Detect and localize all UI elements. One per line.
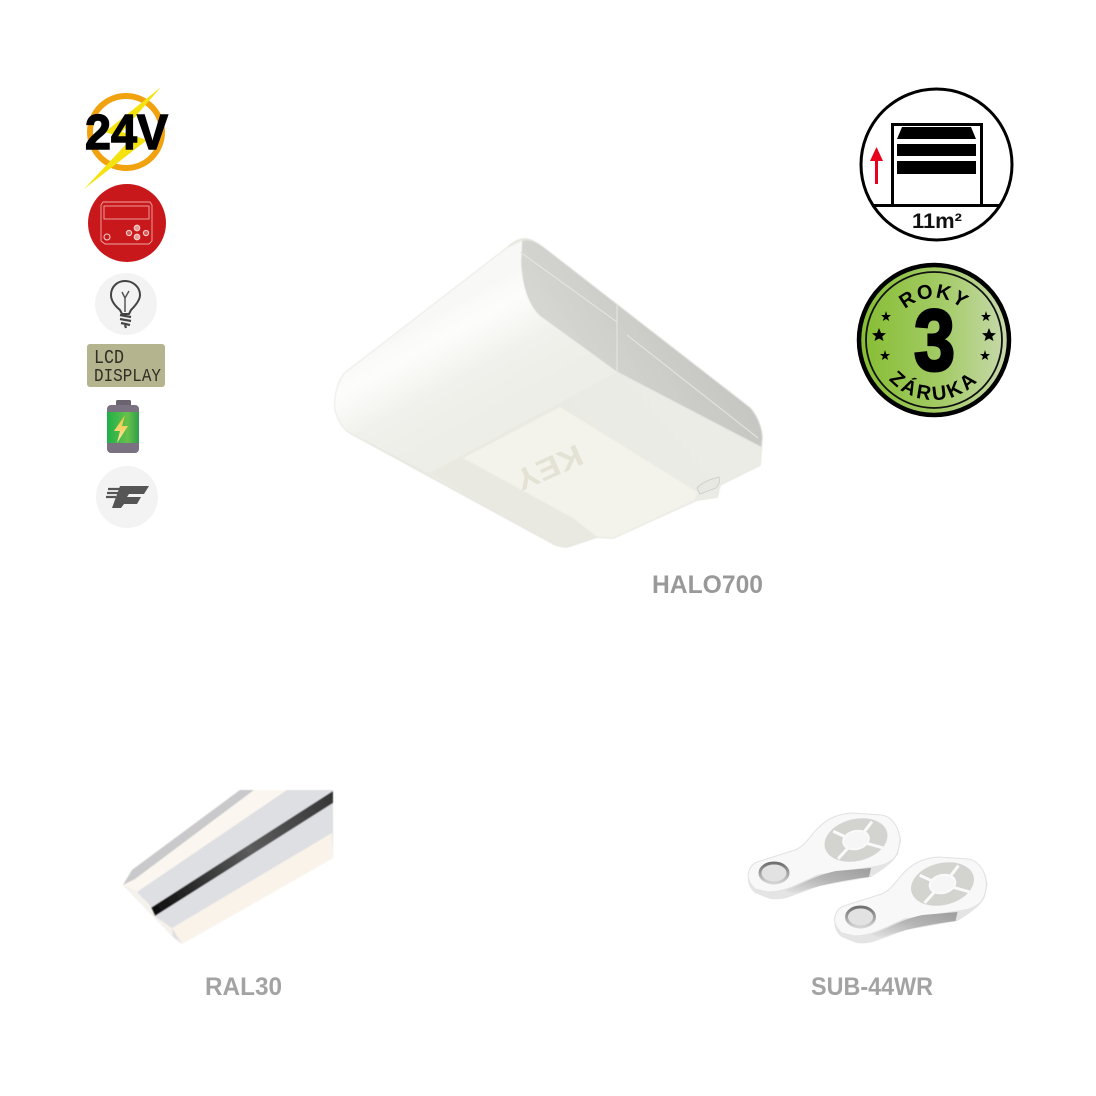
icon: 24V lightning: 24V: [85, 106, 168, 160]
badge: 3 roky záruka: ZÁRUKA: [888, 370, 977, 400]
remote 1: [748, 812, 901, 899]
icon: garage door 11m²: [861, 89, 1012, 240]
icon: red control panel: [88, 184, 166, 262]
product image: HALO700 motor unit: KEY: [510, 438, 588, 496]
main top face: [335, 241, 617, 473]
translucent lamp cover: [463, 407, 697, 538]
product label: HALO700: HALO700: [652, 571, 763, 599]
badge: 3 roky záruka: ROKY: [898, 284, 970, 308]
icon: battery: [107, 400, 139, 453]
product image: HALO700 motor unit: [335, 239, 762, 547]
product label: RAL30: RAL30: [205, 973, 282, 1001]
lower front face: [430, 372, 761, 547]
icon: F logo: [96, 466, 158, 528]
product image: RAL30 rail: [123, 790, 333, 944]
icon: LCD display: [87, 344, 165, 387]
badge: 3 roky záruka: 3: [914, 293, 955, 389]
icon: garage door 11m²: 11m²: [912, 210, 962, 233]
icon: LCD display: DISPLAY: [94, 367, 161, 387]
icon: light bulb: [95, 273, 157, 335]
remote 2: [834, 856, 988, 943]
product label: SUB-44WR: SUB-44WR: [811, 973, 933, 1001]
grey side face: [521, 240, 762, 447]
icon: 24V lightning: [84, 87, 168, 189]
product image: SUB-44WR remotes: [748, 812, 988, 943]
badge: 3 roky záruka: [856, 262, 1012, 418]
icon: LCD display: LCD: [94, 347, 124, 369]
